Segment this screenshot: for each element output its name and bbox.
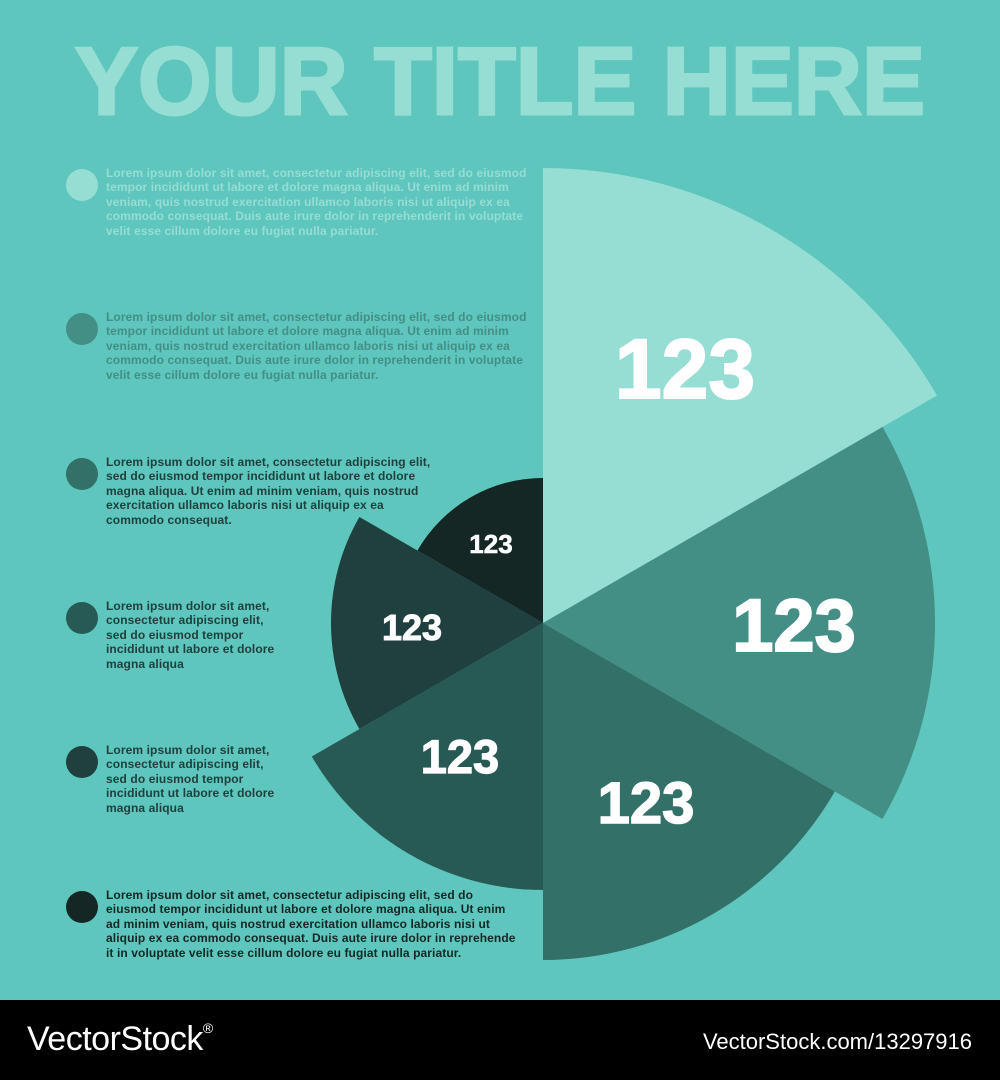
legend item 6 xyxy=(66,888,516,960)
legend item 2: veniam, quis nostrud exercitation ullamco laboris nisi ut aliquip ex ea xyxy=(106,339,510,353)
legend item 4: magna aliqua xyxy=(106,657,184,671)
legend item 4: Lorem ipsum dolor sit amet, xyxy=(106,599,269,613)
segment 2 xyxy=(543,427,935,819)
legend item 5: sed do eiusmod tempor xyxy=(106,772,243,786)
legend item 1: Lorem ipsum dolor sit amet, consectetur adipiscing elit, sed do eiusmod xyxy=(106,166,527,180)
legend item 6: aliquip ex ea commodo consequat. Duis aute irure dolor in reprehende xyxy=(106,931,516,945)
legend item 5: magna aliqua xyxy=(106,801,184,815)
segment 1 xyxy=(543,168,937,623)
legend item 3: commodo consequat. xyxy=(106,513,232,527)
legend item 1 xyxy=(66,166,527,238)
legend item 2 xyxy=(66,310,527,382)
legend item 4 xyxy=(66,599,274,671)
legend item 1: commodo consequat. Duis aute irure dolor in reprehenderit in voluptate xyxy=(106,209,523,223)
legend item 3: exercitation ullamco laboris nisi ut aliquip ex ea xyxy=(106,498,384,512)
segment 5 xyxy=(331,517,543,729)
segment 6 xyxy=(417,478,543,623)
legend item 2: commodo consequat. Duis aute irure dolor in reprehenderit in voluptate xyxy=(106,353,523,367)
legend item 1: veniam, quis nostrud exercitation ullamco laboris nisi ut aliquip ex ea xyxy=(106,195,510,209)
legend item 4: incididunt ut labore et dolore xyxy=(106,642,274,656)
legend item 4: consectetur adipiscing elit, xyxy=(106,613,264,627)
segment 5: 123 xyxy=(382,607,442,648)
legend item 2: tempor incididunt ut labore et dolore magna aliqua. Ut enim ad minim xyxy=(106,324,509,338)
legend item 1: tempor incididunt ut labore et dolore magna aliqua. Ut enim ad minim xyxy=(106,180,509,194)
legend item 6: eiusmod tempor incididunt ut labore et dolore magna aliqua. Ut enim xyxy=(106,902,505,916)
segment 4 xyxy=(312,623,543,890)
legend item 6: it in voluptate velit esse cillum dolore eu fugiat nulla pariatur. xyxy=(106,946,461,960)
segment 3 xyxy=(543,623,835,960)
legend item 2: Lorem ipsum dolor sit amet, consectetur adipiscing elit, sed do eiusmod xyxy=(106,310,527,324)
legend item 3: Lorem ipsum dolor sit amet, consectetur adipiscing elit, xyxy=(106,455,430,469)
segment 3: 123 xyxy=(598,771,694,836)
legend item 2: velit esse cillum dolore eu fugiat nulla pariatur. xyxy=(106,368,378,382)
legend item 3: sed do eiusmod tempor incididunt ut labore et dolore xyxy=(106,469,415,483)
legend item 3: magna aliqua. Ut enim ad minim veniam, quis nostrud xyxy=(106,484,418,498)
segment 4: 123 xyxy=(421,730,499,783)
segment 2: 123 xyxy=(732,584,856,667)
segment 6: 123 xyxy=(469,529,513,559)
legend item 5: incididunt ut labore et dolore xyxy=(106,786,274,800)
legend item 6: Lorem ipsum dolor sit amet, consectetur adipiscing elit, sed do xyxy=(106,888,473,902)
legend item 5: consectetur adipiscing elit, xyxy=(106,757,264,771)
footer xyxy=(0,1000,1000,1080)
footer url: VectorStock.com/13297916 xyxy=(703,1029,972,1054)
legend item 5 xyxy=(66,743,274,815)
segment 1: 123 xyxy=(615,322,755,416)
legend item 3 xyxy=(66,455,430,527)
legend item 6: ad minim veniam, quis nostrud exercitation ullamco laboris nisi ut xyxy=(106,917,490,931)
footer brand: VectorStock® xyxy=(27,1020,213,1058)
legend item 1: velit esse cillum dolore eu fugiat nulla pariatur. xyxy=(106,224,378,238)
legend item 4: sed do eiusmod tempor xyxy=(106,628,243,642)
legend item 5: Lorem ipsum dolor sit amet, xyxy=(106,743,269,757)
